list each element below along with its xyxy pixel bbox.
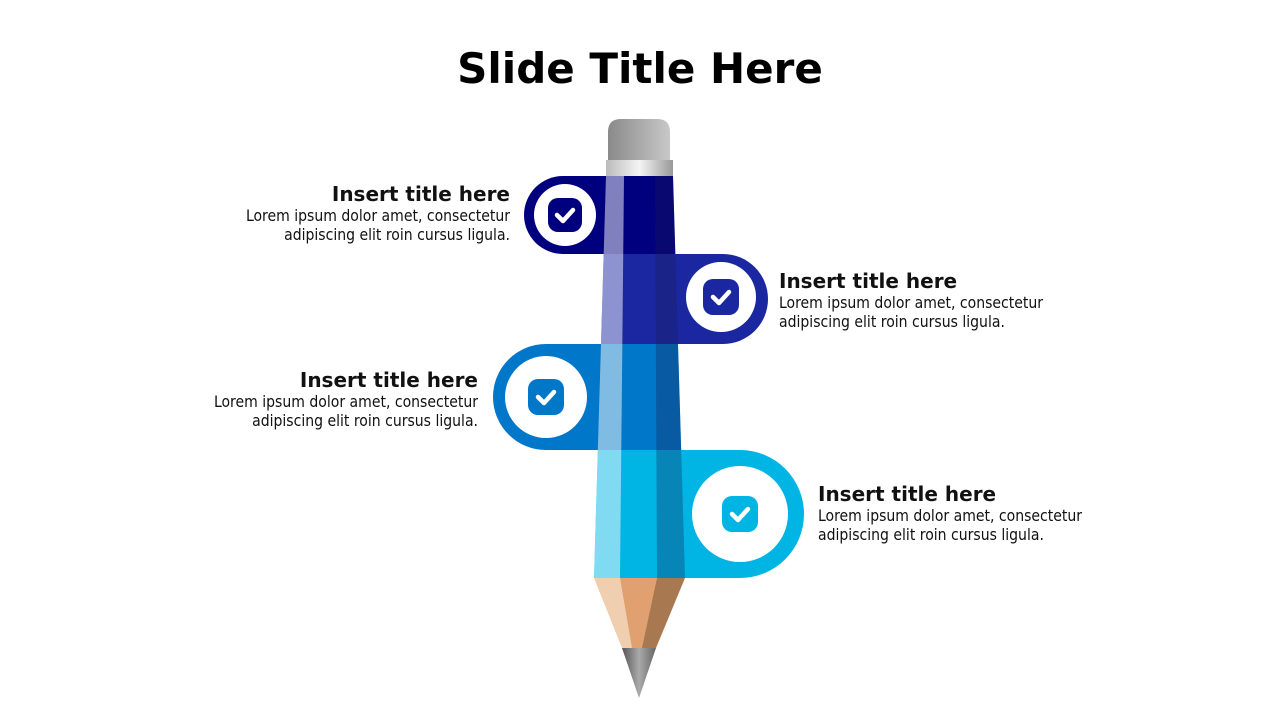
text 2: adipiscing elit roin cursus ligula. bbox=[779, 313, 1005, 331]
tab 2 bbox=[640, 254, 768, 344]
text 1 bbox=[246, 182, 510, 244]
tab 1 bbox=[524, 176, 620, 254]
title: Slide Title Here bbox=[457, 44, 823, 93]
text 3 bbox=[214, 368, 478, 430]
text 1: Insert title here bbox=[332, 182, 510, 206]
text 1: Lorem ipsum dolor amet, consectetur bbox=[246, 207, 510, 225]
text 4: Insert title here bbox=[818, 482, 996, 506]
text 2: Lorem ipsum dolor amet, consectetur bbox=[779, 294, 1043, 312]
eraser bbox=[606, 119, 673, 176]
pencil body bbox=[590, 176, 690, 578]
text 4: adipiscing elit roin cursus ligula. bbox=[818, 526, 1044, 544]
text 2: Insert title here bbox=[779, 269, 957, 293]
tab 4 bbox=[650, 450, 804, 578]
pencil tip bbox=[594, 578, 685, 698]
text 2 bbox=[779, 269, 1044, 331]
tab 3 bbox=[493, 344, 630, 450]
text 3: Lorem ipsum dolor amet, consectetur bbox=[214, 393, 478, 411]
text 3: Insert title here bbox=[300, 368, 478, 392]
text 3: adipiscing elit roin cursus ligula. bbox=[252, 412, 478, 430]
pencil infographic bbox=[493, 119, 804, 698]
text 4 bbox=[818, 482, 1082, 544]
text 1: adipiscing elit roin cursus ligula. bbox=[284, 226, 510, 244]
text 4: Lorem ipsum dolor amet, consectetur bbox=[818, 507, 1082, 525]
